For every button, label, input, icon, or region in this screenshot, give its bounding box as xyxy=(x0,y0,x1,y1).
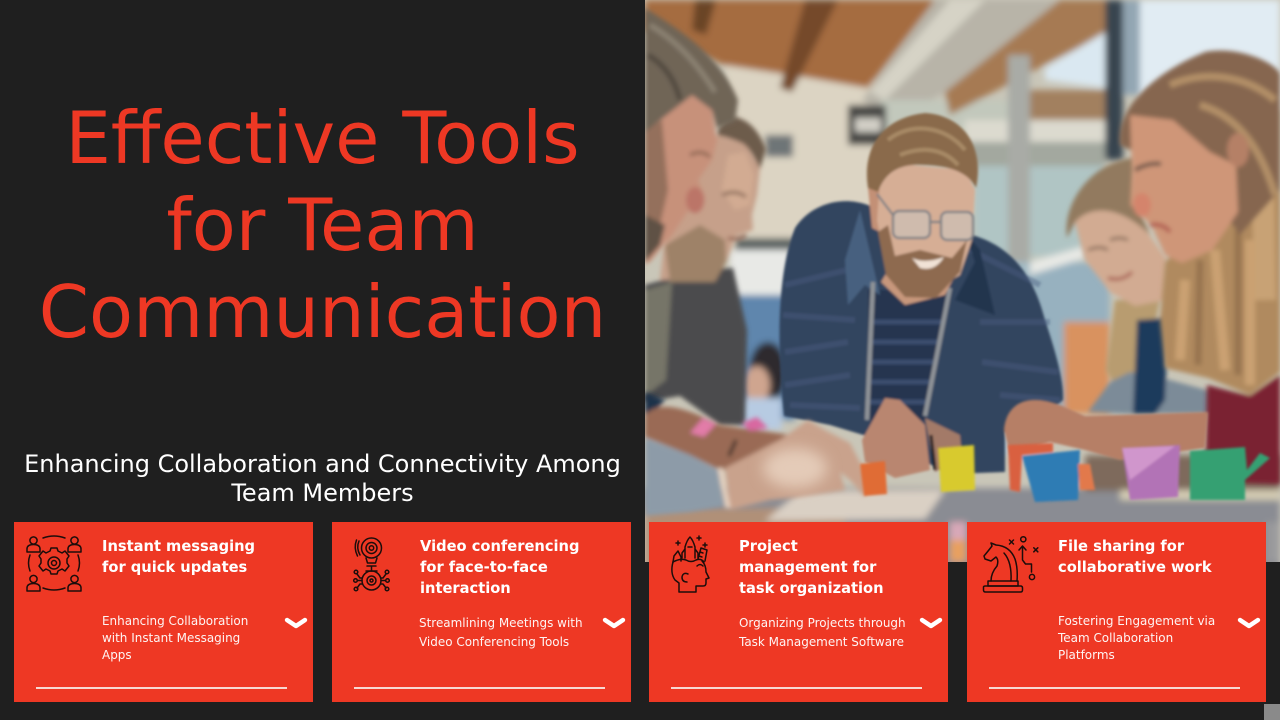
title: for Team xyxy=(166,183,479,267)
title xyxy=(39,96,606,354)
subtitle xyxy=(24,450,621,507)
panel: project management xyxy=(649,522,948,702)
description: with Instant Messaging xyxy=(102,630,240,644)
heading: task organization xyxy=(739,580,884,597)
arm of woman xyxy=(1004,400,1208,460)
hand highlight xyxy=(763,448,827,488)
heading: Video conferencing xyxy=(420,538,579,555)
description: Enhancing Collaboration xyxy=(102,614,248,628)
description: Organizing Projects through xyxy=(739,616,906,630)
icon: head with rocket and pencil xyxy=(671,535,710,593)
icon: chevron xyxy=(284,618,308,628)
panel: file sharing xyxy=(967,522,1266,702)
description: Fostering Engagement via xyxy=(1058,614,1215,628)
description xyxy=(102,614,248,662)
description: Task Management Software xyxy=(739,634,904,648)
heading: for face-to-face xyxy=(420,559,548,576)
foreground arm and hand xyxy=(645,392,868,516)
heading: management for xyxy=(739,559,876,576)
heading xyxy=(1058,538,1212,576)
person: man in blue sweater xyxy=(779,113,1063,478)
description: Apps xyxy=(102,648,132,662)
panel: instant messaging xyxy=(14,522,313,702)
person: man in foreground left xyxy=(645,8,738,264)
title: Communication xyxy=(39,270,606,354)
heading xyxy=(739,538,884,597)
description: Platforms xyxy=(1058,648,1115,662)
heading: Instant messaging xyxy=(102,538,255,555)
person: woman in striped cardigan xyxy=(1066,158,1214,414)
photo: team collaborating around a table xyxy=(645,0,1280,562)
description: Streamlining Meetings with xyxy=(419,616,583,630)
description xyxy=(738,616,906,648)
heading: collaborative work xyxy=(1058,559,1212,576)
person: woman with long hair xyxy=(1120,51,1280,484)
icon: light bulb with circuit xyxy=(353,537,390,592)
description xyxy=(419,616,583,648)
colourful building blocks xyxy=(860,443,1270,502)
icon: chevron xyxy=(920,618,942,628)
heading: File sharing for xyxy=(1058,538,1184,555)
heading: Project xyxy=(739,538,798,555)
description xyxy=(1058,614,1215,662)
title: Effective Tools xyxy=(65,96,580,180)
description: Video Conferencing Tools xyxy=(419,634,569,648)
panel: video conferencing xyxy=(332,522,631,702)
icon: chevron xyxy=(602,618,626,628)
subtitle: Enhancing Collaboration and Connectivity Among xyxy=(24,450,621,478)
heading: for quick updates xyxy=(102,559,247,576)
heading: interaction xyxy=(420,580,511,597)
icon: chevron xyxy=(1238,618,1260,628)
description: Team Collaboration xyxy=(1058,630,1173,644)
icon: gear with people xyxy=(26,535,82,592)
subtitle: Team Members xyxy=(231,479,414,507)
corner marker xyxy=(1264,704,1280,720)
icon: chess knight with strategy arrow xyxy=(982,536,1039,593)
table xyxy=(645,455,1280,568)
heading xyxy=(102,538,255,576)
heading xyxy=(420,538,579,597)
person: man in dark grey shirt xyxy=(645,117,766,425)
